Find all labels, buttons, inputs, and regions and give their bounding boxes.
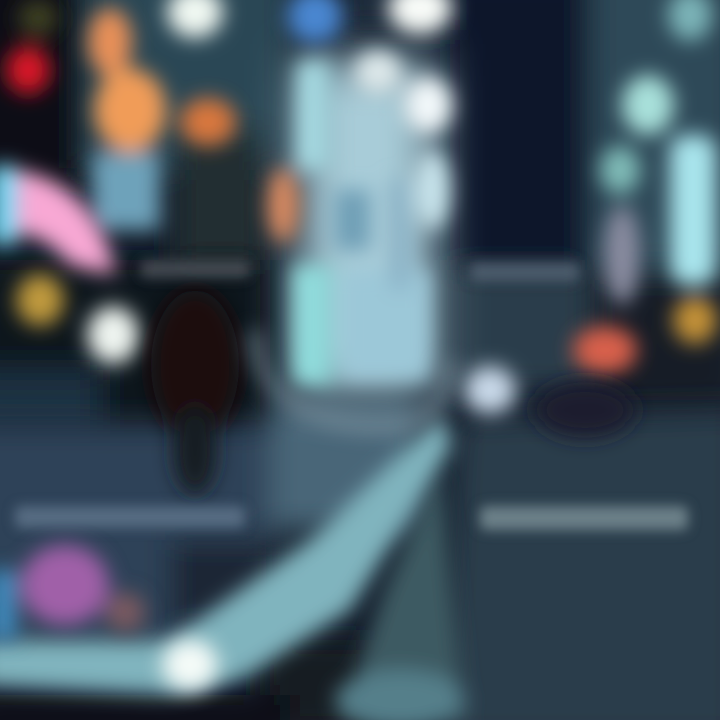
reflections <box>0 545 145 640</box>
pink awning <box>0 165 115 275</box>
orange signs <box>88 8 236 230</box>
dark car <box>535 382 635 438</box>
street lights <box>6 0 717 414</box>
curb <box>0 415 452 695</box>
illuminated storefront column <box>300 60 435 390</box>
background building masses <box>0 0 720 430</box>
dark figure <box>151 290 239 495</box>
horizontal light bars <box>15 260 688 530</box>
bright reflection <box>162 639 218 691</box>
ring highlight <box>255 330 448 426</box>
storefront details <box>267 0 452 385</box>
road strip <box>335 470 465 720</box>
road surface <box>0 400 720 720</box>
